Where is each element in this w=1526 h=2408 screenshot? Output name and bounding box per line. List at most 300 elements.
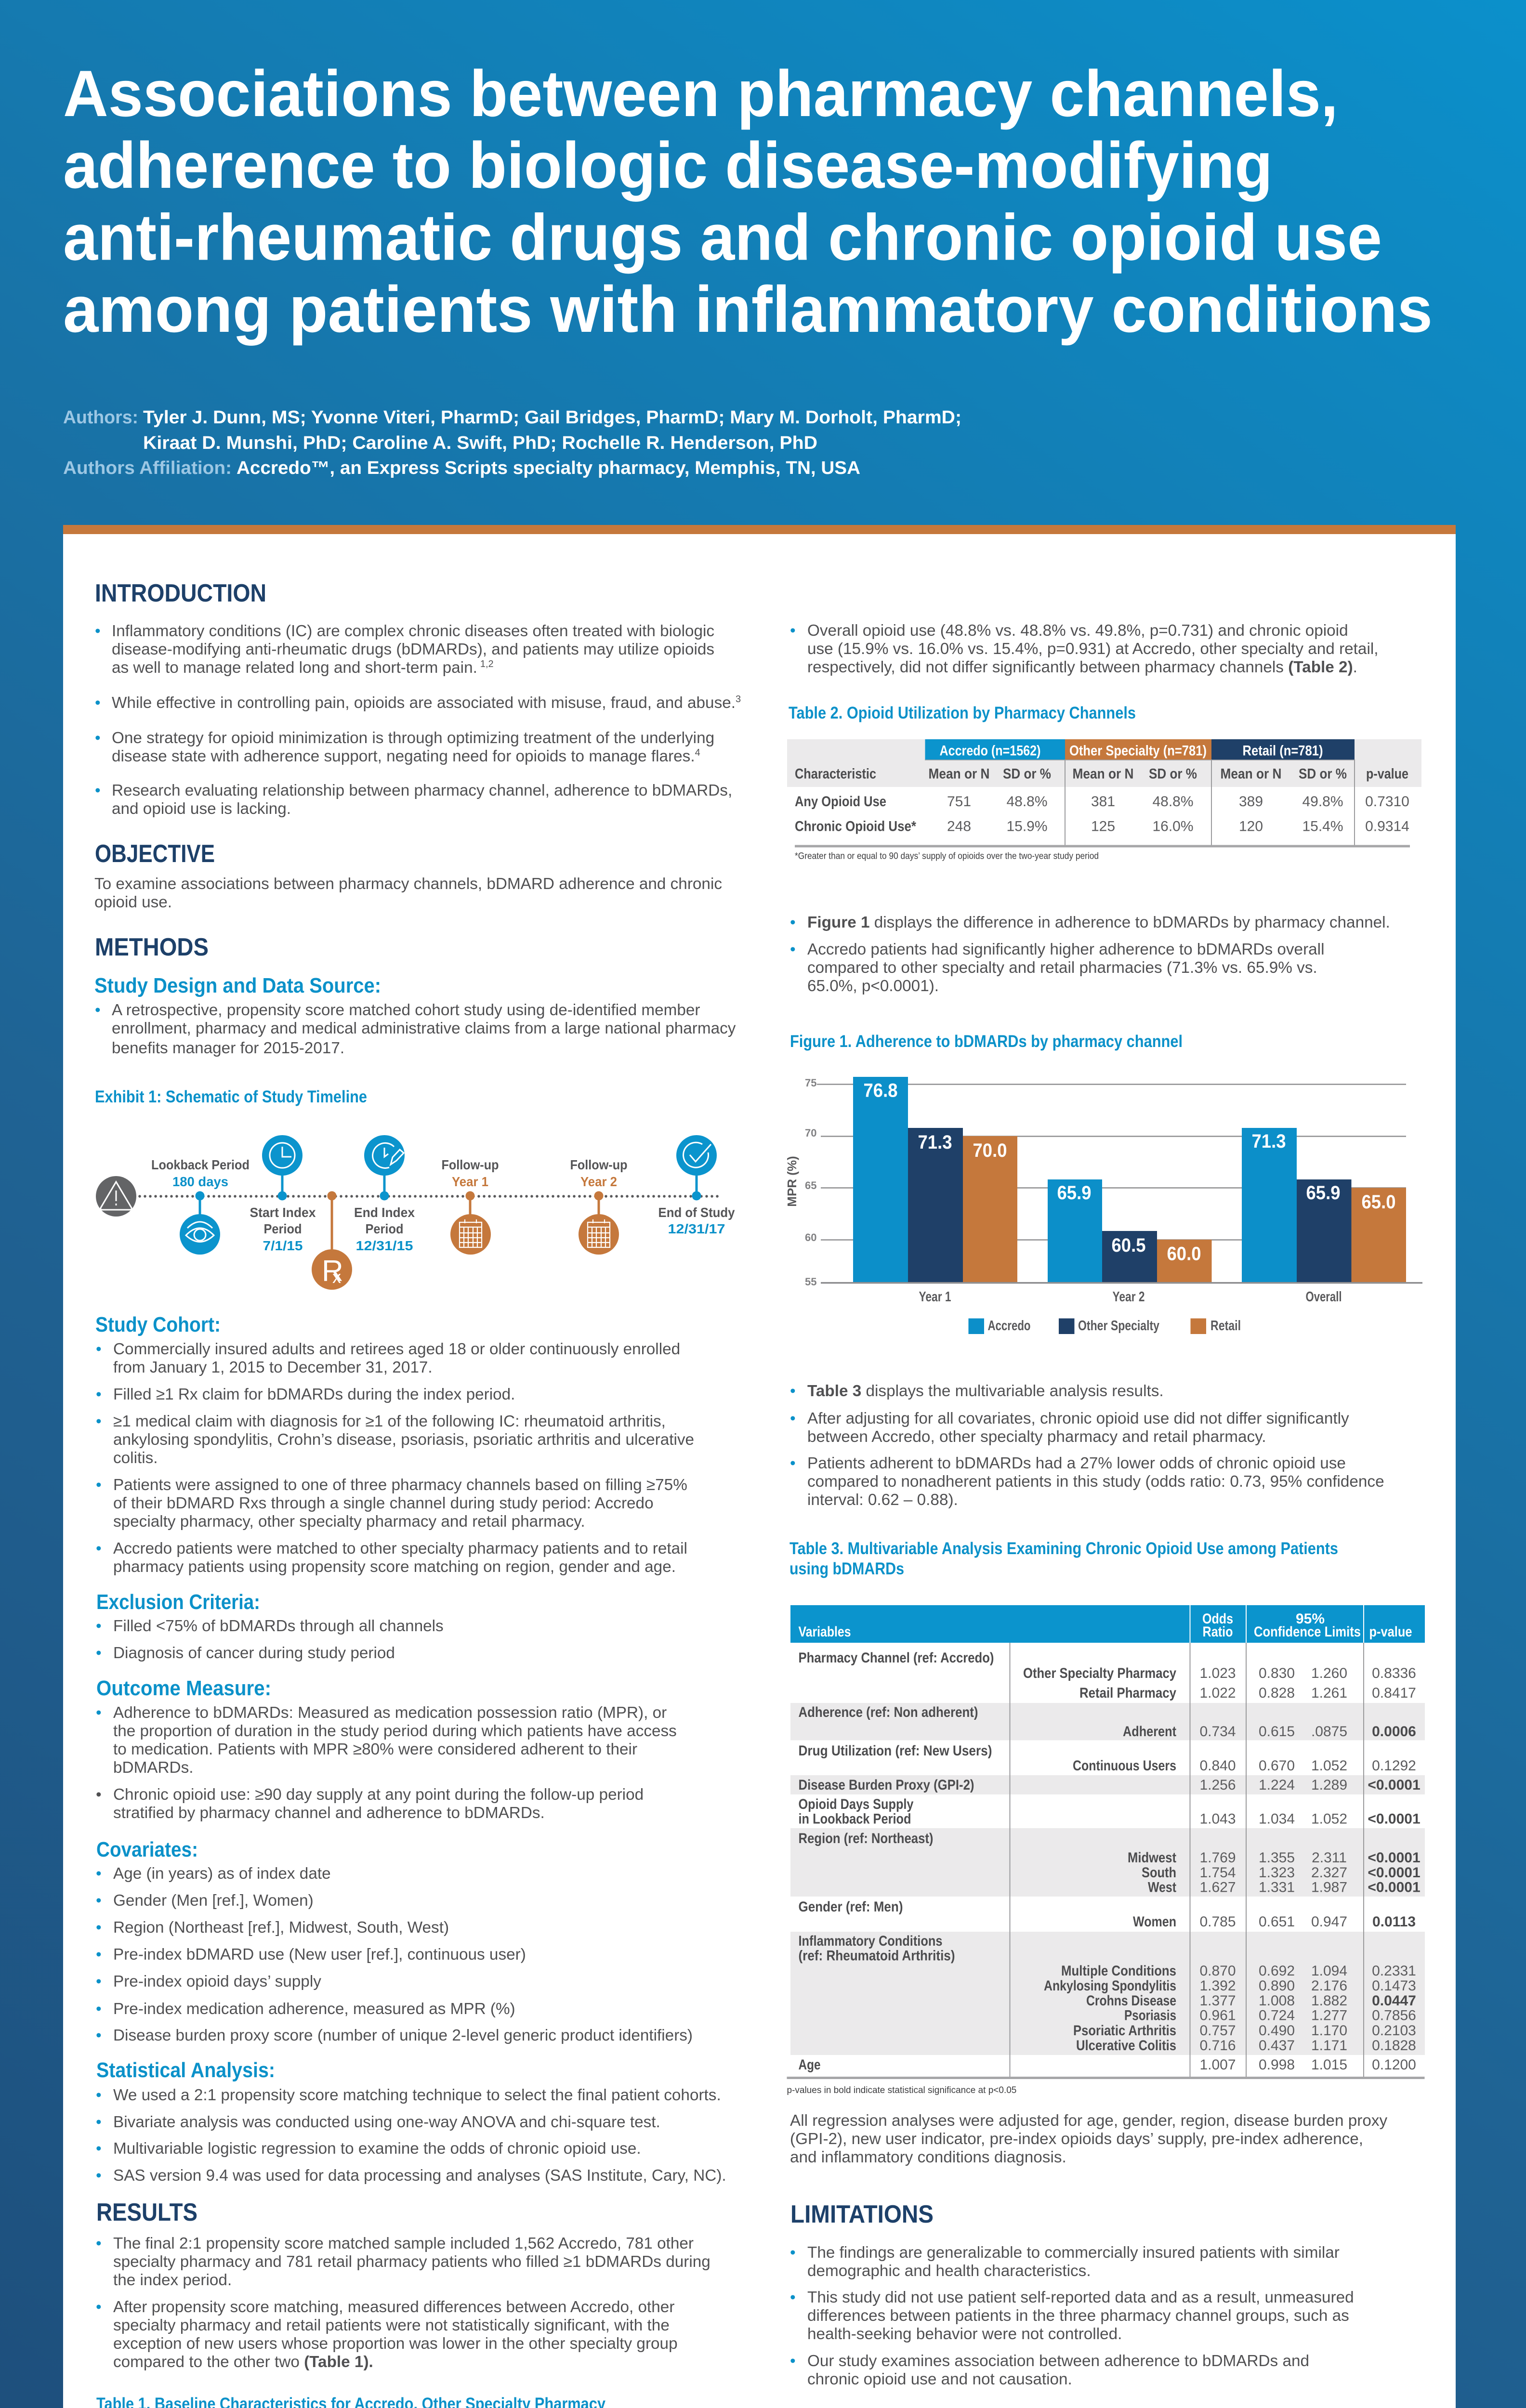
text: covariates bullets: • xyxy=(96,2000,102,2018)
milestone: end index period: End Index xyxy=(354,1205,415,1220)
text: figure 1 bullets: • xyxy=(790,914,796,931)
milestone: start index period: 7/1/15 xyxy=(263,1238,303,1253)
milestone: end index period xyxy=(354,1135,415,1253)
text: results bullets: specialty pharmacy and 781 retail pharmacy patients who filled ≥1 bDMARDs during xyxy=(113,2253,710,2271)
row: inflammatory conditions: 0.437 xyxy=(1259,2038,1295,2054)
subheading: exclusion criteria: Exclusion Criteria: xyxy=(96,1590,260,1614)
title: among patients with inflammatory conditions xyxy=(63,273,1433,346)
legend: Accredo xyxy=(987,1318,1031,1334)
text: results bullets: compared to the other two xyxy=(113,2353,304,2371)
row: region: 1.754 xyxy=(1199,1865,1236,1881)
text: results bullets: exception of new users whose proportion was lower in the other specialty group xyxy=(113,2335,678,2353)
text: covariates bullets: • xyxy=(96,1946,102,1963)
row: adherence: 0.0006 xyxy=(1372,1724,1416,1740)
bars: overall: 65.9 xyxy=(1306,1182,1340,1204)
row: inflammatory conditions xyxy=(799,1933,1416,2054)
table 2 header: p-value xyxy=(1366,766,1408,782)
row: gender: 0.785 xyxy=(1199,1914,1236,1930)
row: region: 1.627 xyxy=(1199,1879,1236,1896)
text: study cohort bullets: specialty pharmacy, other specialty pharmacy and retail pharmacy. xyxy=(113,1513,585,1531)
shaded row bands xyxy=(790,1703,1425,2055)
milestone: follow-up year 1 xyxy=(441,1157,499,1255)
row: any opioid use: 48.8% xyxy=(1006,794,1048,810)
row: any opioid use: Any Opioid Use xyxy=(795,794,886,810)
row: region: Region (ref: Northeast) xyxy=(799,1831,934,1846)
text: table 3 bullets: between Accredo, other specialty pharmacy and retail pharmacy. xyxy=(807,1428,1266,1446)
row: any opioid use xyxy=(795,794,1409,810)
row: pharmacy channel: Retail Pharmacy xyxy=(1079,1685,1176,1701)
text: objective: To examine associations between pharmacy channels, bDMARD adherence and chronic xyxy=(94,875,722,893)
row: drug utilization: 0.670 xyxy=(1259,1758,1295,1774)
text: study design bullet: • xyxy=(95,1001,101,1019)
row: inflammatory conditions: 0.890 xyxy=(1259,1978,1295,1994)
milestone: start index period xyxy=(250,1135,316,1253)
row: any opioid use: 0.7310 xyxy=(1365,794,1409,810)
text: exclusion bullets: • xyxy=(96,1644,102,1662)
row: any opioid use: 48.8% xyxy=(1152,794,1194,810)
table 2 header: SD or % xyxy=(1299,766,1347,782)
title: adherence to biologic disease-modifying xyxy=(63,129,1273,202)
text: outcome bullets: • xyxy=(96,1786,102,1804)
text: intro bullet 3: One strategy for opioid minimization is through optimizing treatment of the underlying xyxy=(112,729,714,747)
x axis labels xyxy=(919,1289,1342,1305)
bars: year 1 xyxy=(853,1077,1017,1283)
row: inflammatory conditions: Psoriatic Arthritis xyxy=(1073,2023,1176,2039)
text: results bullets: • xyxy=(96,2235,102,2252)
authors and affiliation: Accredo™, an Express Scripts specialty pharmacy, Memphis, TN, USA xyxy=(237,458,860,478)
text: figure 1 bullets: • xyxy=(790,941,796,958)
text: statistical analysis bullets: • xyxy=(96,2167,102,2185)
row: inflammatory conditions: 0.2331 xyxy=(1372,1963,1416,1979)
text: table 3 bullets: After adjusting for all covariates, chronic opioid use did not differ significantly xyxy=(807,1410,1349,1427)
row: pharmacy channel: 1.023 xyxy=(1199,1665,1236,1681)
row: inflammatory conditions: 1.008 xyxy=(1259,1993,1295,2009)
row: chronic opioid use: Chronic Opioid Use* xyxy=(795,819,916,834)
row: pharmacy channel: Pharmacy Channel (ref: Accredo) xyxy=(799,1650,994,1666)
text: overall opioid use bullet: • xyxy=(790,622,796,640)
bars: year 2: 60.5 xyxy=(1112,1235,1145,1256)
heading: objective: OBJECTIVE xyxy=(95,840,215,868)
row: region: 2.311 xyxy=(1312,1850,1347,1866)
milestone: follow-up year 1: Year 1 xyxy=(452,1174,488,1189)
text: results bullets: specialty pharmacy and retail patients were not statistically significant, with the xyxy=(113,2316,670,2334)
row: age: Age xyxy=(799,2057,821,2073)
row: region: 1.987 xyxy=(1311,1879,1347,1896)
text: outcome bullets: • xyxy=(96,1704,102,1722)
row: inflammatory conditions: 0.7856 xyxy=(1372,2007,1416,2024)
row: inflammatory conditions: Inflammatory Conditions xyxy=(799,1933,942,1949)
row: any opioid use: 381 xyxy=(1091,794,1115,810)
panel: right column xyxy=(785,622,1425,2408)
y axis tick labels xyxy=(805,1077,816,1288)
row: region xyxy=(799,1831,1421,1896)
row: disease burden proxy: <0.0001 xyxy=(1368,1777,1421,1793)
title: anti-rheumatic drugs and chronic opioid use xyxy=(63,200,1382,274)
legend xyxy=(968,1318,1241,1334)
row: pharmacy channel: 0.8336 xyxy=(1372,1665,1416,1681)
row: disease burden proxy: 1.289 xyxy=(1311,1777,1347,1793)
row: chronic opioid use: 248 xyxy=(947,819,971,834)
text: intro bullet 2: 3 xyxy=(736,694,741,705)
text: covariates bullets: Pre-index bDMARD use (New user [ref.], continuous user) xyxy=(113,1946,526,1963)
row: drug utilization xyxy=(799,1743,1416,1774)
row: opioid days supply: 1.043 xyxy=(1199,1811,1236,1827)
bars: year 1: 70.0 xyxy=(973,1140,1007,1161)
row: inflammatory conditions: 0.490 xyxy=(1259,2023,1295,2039)
y axis title: MPR (%) xyxy=(785,1156,799,1207)
row: disease burden proxy xyxy=(799,1777,1421,1793)
text: outcome bullets: the proportion of duration in the study period during which patients have access xyxy=(113,1722,677,1740)
row: gender: 0.947 xyxy=(1311,1914,1347,1930)
text: study design bullet: enrollment, pharmacy and medical administrative claims from a large national pharmacy xyxy=(112,1020,736,1037)
row: inflammatory conditions: 1.377 xyxy=(1199,1993,1236,2009)
row: age: 0.998 xyxy=(1259,2057,1295,2073)
text: limitations bullets: chronic opioid use and not causation. xyxy=(807,2370,1072,2388)
row: pharmacy channel: 1.022 xyxy=(1199,1685,1236,1701)
caption: table 3 xyxy=(789,1539,1338,1578)
text: study cohort bullets: • xyxy=(96,1340,102,1358)
text: exclusion bullets: Filled <75% of bDMARDs through all channels xyxy=(113,1617,444,1635)
text: table 3 bullets: • xyxy=(790,1382,796,1400)
subheading: study design: Study Design and Data Source: xyxy=(94,974,381,997)
text: covariates bullets: • xyxy=(96,1865,102,1883)
table 3: multivariable analysis xyxy=(787,1605,1425,2079)
text: exclusion bullets: Diagnosis of cancer during study period xyxy=(113,1644,395,1662)
text: results bullets: • xyxy=(96,2298,102,2316)
text: outcome bullets: stratified by pharmacy channel and adherence to bDMARDs. xyxy=(113,1804,545,1822)
table 3 footnote: p-values in bold indicate statistical significance at p<0.05 xyxy=(787,2085,1016,2095)
row: inflammatory conditions: 1.171 xyxy=(1311,2038,1347,2054)
text: intro bullet 1: • xyxy=(95,622,101,640)
row: pharmacy channel: 1.260 xyxy=(1311,1665,1347,1681)
heading: results: RESULTS xyxy=(96,2199,197,2226)
row: inflammatory conditions: 1.094 xyxy=(1311,1963,1347,1979)
table 2 header: Mean or N xyxy=(929,766,989,782)
text: intro bullet 1: disease-modifying anti-rheumatic drugs (bDMARDs), and patients may utilize opioids xyxy=(112,641,714,658)
text: intro bullet 3: • xyxy=(95,729,101,747)
row: inflammatory conditions: 0.716 xyxy=(1199,2038,1236,2054)
text: regression adjustment note: and inflammatory conditions diagnosis. xyxy=(790,2148,1066,2166)
text: intro bullet 3: 4 xyxy=(695,747,700,758)
row: drug utilization: 0.840 xyxy=(1199,1758,1236,1774)
title xyxy=(63,57,1433,346)
row: region: South xyxy=(1142,1865,1176,1881)
row: disease burden proxy: 1.224 xyxy=(1259,1777,1295,1793)
caption: exhibit 1: Exhibit 1: Schematic of Study Timeline xyxy=(95,1087,367,1106)
table 2 header xyxy=(787,739,1421,787)
y axis tick labels: 60 xyxy=(805,1231,816,1243)
x axis labels: Year 1 xyxy=(919,1289,951,1305)
table 3 header: p-value xyxy=(1369,1624,1412,1640)
row: inflammatory conditions: 0.1828 xyxy=(1372,2038,1416,2054)
text: objective: opioid use. xyxy=(94,893,172,911)
table 3 header: Ratio xyxy=(1202,1624,1233,1640)
table 2 header: SD or % xyxy=(1003,766,1051,782)
text: limitations bullets: Our study examines association between adherence to bDMARDs and xyxy=(807,2352,1309,2370)
text: outcome bullets: to medication. Patients with MPR ≥80% were considered adherent to their xyxy=(113,1741,637,1758)
row: inflammatory conditions: 2.176 xyxy=(1311,1978,1347,1994)
heading: methods: METHODS xyxy=(95,933,209,961)
row: any opioid use: 751 xyxy=(947,794,971,810)
table 2 header: Retail (n=781) xyxy=(1243,743,1323,759)
row: region: 2.327 xyxy=(1311,1865,1347,1881)
text: study cohort bullets: ≥1 medical claim with diagnosis for ≥1 of the following IC: rheumatoid arthritis, xyxy=(113,1413,666,1430)
text: study design bullet: A retrospective, propensity score matched cohort study using de-identified member xyxy=(112,1001,700,1019)
text: limitations bullets: differences between patients in the three pharmacy channel groups, such as xyxy=(807,2307,1349,2325)
heading: limitations: LIMITATIONS xyxy=(790,2200,934,2228)
milestone: lookback period: 180 days xyxy=(172,1174,228,1189)
row: opioid days supply: in Lookback Period xyxy=(799,1811,911,1827)
text: results bullets: the index period. xyxy=(113,2271,232,2289)
row: gender: Women xyxy=(1133,1914,1176,1930)
y axis tick labels: 55 xyxy=(805,1276,816,1288)
milestone: end index period: Period xyxy=(365,1221,404,1236)
caption: table 2: Table 2. Opioid Utilization by Pharmacy Channels xyxy=(789,704,1136,722)
table 2 header: Mean or N xyxy=(1221,766,1281,782)
row: chronic opioid use: 120 xyxy=(1239,819,1263,834)
row: inflammatory conditions: Ulcerative Colitis xyxy=(1076,2038,1176,2054)
text: covariates bullets: Disease burden proxy score (number of unique 2-level generic product identifiers) xyxy=(113,2027,693,2044)
x axis labels: Year 2 xyxy=(1113,1289,1144,1305)
text: figure 1 bullets: 65.0%, p<0.0001). xyxy=(807,977,939,995)
row: age: 0.1200 xyxy=(1372,2057,1416,2073)
text: study cohort bullets: • xyxy=(96,1386,102,1403)
legend: Other Specialty xyxy=(1078,1318,1159,1334)
row: drug utilization: 1.052 xyxy=(1311,1758,1347,1774)
row: inflammatory conditions: 0.961 xyxy=(1199,2007,1236,2024)
bars: overall: 65.0 xyxy=(1361,1191,1396,1213)
table 2 footnote: *Greater than or equal to 90 days’ supply of opioids over the two-year study period xyxy=(795,851,1099,861)
milestone: follow-up year 2: Follow-up xyxy=(570,1157,627,1172)
table 3 header: Confidence Limits xyxy=(1254,1624,1361,1640)
table 2 header: Mean or N xyxy=(1072,766,1134,782)
text: limitations bullets: • xyxy=(790,2352,796,2370)
text: intro bullet 4: Research evaluating relationship between pharmacy channel, adherence to bDMARDs, xyxy=(112,782,732,799)
text: outcome bullets: Adherence to bDMARDs: Measured as medication possession ratio (MPR), or xyxy=(113,1704,667,1722)
text: outcome bullets: bDMARDs. xyxy=(113,1759,194,1777)
text: overall opioid use bullet: use (15.9% vs. 16.0% vs. 15.4%, p=0.931) at Accredo, other specialty and retail, xyxy=(807,640,1379,658)
row: gender: Gender (ref: Men) xyxy=(799,1899,903,1915)
text: table 3 bullets: Patients adherent to bDMARDs had a 27% lower odds of chronic opioid use xyxy=(807,1454,1346,1472)
row: age: 1.007 xyxy=(1199,2057,1236,2073)
text: covariates bullets: • xyxy=(96,1919,102,1937)
title: Associations between pharmacy channels, xyxy=(63,57,1338,130)
milestone: follow-up year 1: Follow-up xyxy=(441,1157,499,1172)
text: covariates bullets: • xyxy=(96,2027,102,2044)
x axis labels: Overall xyxy=(1305,1289,1342,1305)
text: exclusion bullets: • xyxy=(96,1617,102,1635)
y axis tick labels: 70 xyxy=(805,1127,816,1139)
text: statistical analysis bullets: SAS version 9.4 was used for data processing and analyses (SAS Institute, Cary, NC). xyxy=(113,2167,726,2185)
authors and affiliation: Tyler J. Dunn, MS; Yvonne Viteri, PharmD; Gail Bridges, PharmD; Mary M. Dorholt, PharmD; xyxy=(143,407,961,428)
row: opioid days supply: 1.052 xyxy=(1311,1811,1347,1827)
table 2: opioid utilization xyxy=(787,739,1421,848)
milestone: follow-up year 2 xyxy=(570,1157,627,1255)
text: study cohort bullets: Commercially insured adults and retirees aged 18 or older continuously enrolled xyxy=(113,1340,680,1358)
text: study cohort bullets: ankylosing spondylitis, Crohn’s disease, psoriasis, psoriatic arthritis and ulcerative xyxy=(113,1431,694,1449)
text: outcome bullets: Chronic opioid use: ≥90 day supply at any point during the follow-up period xyxy=(113,1786,644,1804)
text: overall opioid use bullet: respectively, did not differ significantly between pharmacy channels xyxy=(807,658,1288,676)
text: study cohort bullets: of their bDMARD Rxs through a single channel during study period: Accredo xyxy=(113,1494,654,1512)
row: inflammatory conditions: (ref: Rheumatoid Arthritis) xyxy=(799,1948,955,1964)
text: limitations bullets: • xyxy=(790,2244,796,2262)
row: region: 1.355 xyxy=(1259,1850,1295,1866)
text: covariates bullets: Age (in years) as of index date xyxy=(113,1865,331,1883)
text: overall opioid use bullet: (Table 2). xyxy=(1288,658,1357,676)
row: region: <0.0001 xyxy=(1368,1879,1421,1896)
text: results bullets: After propensity score matching, measured differences between Accredo, other xyxy=(113,2298,674,2316)
subheading: outcome measure: Outcome Measure: xyxy=(96,1676,271,1700)
text: intro bullet 2: While effective in controlling pain, opioids are associated with misuse, fraud, and abuse. xyxy=(112,694,736,712)
text: regression adjustment note: All regression analyses were adjusted for age, gender, region, disease burden proxy xyxy=(790,2112,1387,2130)
text: table 3 bullets: • xyxy=(790,1410,796,1427)
row: region: 1.769 xyxy=(1199,1850,1236,1866)
text: intro bullet 4: and opioid use is lacking. xyxy=(112,800,291,818)
text: table 3 bullets: • xyxy=(790,1454,796,1472)
bars: year 2 xyxy=(1048,1179,1212,1283)
caption: figure 1: Figure 1. Adherence to bDMARDs by pharmacy channel xyxy=(790,1032,1183,1051)
row: chronic opioid use: 15.9% xyxy=(1006,819,1048,834)
table 3 header xyxy=(790,1605,1425,1643)
text: statistical analysis bullets: Multivariable logistic regression to examine the odds of chronic opioid use. xyxy=(113,2140,641,2158)
text: figure 1 bullets: Accredo patients had significantly higher adherence to bDMARDs overall xyxy=(807,941,1324,958)
row: pharmacy channel: 0.828 xyxy=(1259,1685,1295,1701)
milestone: follow-up year 2: Year 2 xyxy=(580,1174,617,1189)
row: inflammatory conditions: 0.0447 xyxy=(1372,1993,1416,2009)
row: inflammatory conditions: Multiple Conditions xyxy=(1061,1963,1176,1979)
authors and affiliation: Authors: xyxy=(63,407,138,428)
row: disease burden proxy: 1.256 xyxy=(1199,1777,1236,1793)
row: inflammatory conditions: 1.882 xyxy=(1311,1993,1347,2009)
row: opioid days supply: Opioid Days Supply xyxy=(799,1796,914,1812)
row: region: West xyxy=(1148,1879,1176,1896)
text: statistical analysis bullets: • xyxy=(96,2086,102,2104)
row: inflammatory conditions: 1.170 xyxy=(1311,2023,1347,2039)
row: adherence: 0.615 xyxy=(1259,1724,1295,1740)
row: pharmacy channel: 0.830 xyxy=(1259,1665,1295,1681)
row: pharmacy channel: 0.8417 xyxy=(1372,1685,1416,1701)
text: statistical analysis bullets: • xyxy=(96,2140,102,2158)
text: limitations bullets: health-seeking behavior were not controlled. xyxy=(807,2325,1122,2343)
milestone: prescription fill: R xyxy=(322,1255,343,1288)
row: drug utilization: 0.1292 xyxy=(1372,1758,1416,1774)
text: covariates bullets: Pre-index medication adherence, measured as MPR (%) xyxy=(113,2000,515,2018)
bar chart: adherence by pharmacy channel xyxy=(785,1077,1422,1334)
text: limitations bullets: The findings are generalizable to commercially insured patients with similar xyxy=(807,2244,1340,2262)
milestone: start index period: Period xyxy=(264,1221,302,1236)
text: limitations bullets: This study did not use patient self-reported data and as a result, unmeasured xyxy=(807,2289,1354,2306)
text: limitations bullets: demographic and health characteristics. xyxy=(807,2262,1091,2280)
text: intro bullet 2: • xyxy=(95,694,101,712)
text: regression adjustment note: (GPI-2), new user indicator, pre-index opioids days’ supply, pre-index adherence, xyxy=(790,2130,1363,2148)
bars: overall: 71.3 xyxy=(1251,1131,1286,1152)
row: drug utilization: Drug Utilization (ref: New Users) xyxy=(799,1743,992,1759)
table 2 header: Accredo (n=1562) xyxy=(939,743,1040,759)
row: chronic opioid use: 16.0% xyxy=(1152,819,1194,834)
timeline: schematic of study xyxy=(96,1135,735,1290)
milestone: end of study xyxy=(658,1135,735,1236)
table 2 header: Other Specialty (n=781) xyxy=(1069,743,1207,759)
text: intro bullet 1: Inflammatory conditions (IC) are complex chronic diseases often treated with biologic xyxy=(112,622,714,640)
row: region: Midwest xyxy=(1128,1850,1176,1866)
text: table 3 bullets: Table 3 xyxy=(807,1382,861,1400)
milestone: end of study: 12/31/17 xyxy=(668,1221,725,1236)
text: study cohort bullets: • xyxy=(96,1413,102,1430)
text: study cohort bullets: Filled ≥1 Rx claim for bDMARDs during the index period. xyxy=(113,1386,515,1403)
text: covariates bullets: • xyxy=(96,1973,102,1990)
milestone: prescription fill xyxy=(312,1191,352,1290)
bars: overall xyxy=(1242,1128,1406,1283)
row: chronic opioid use: 0.9314 xyxy=(1365,819,1409,834)
authors and affiliation xyxy=(63,407,961,478)
row: pharmacy channel: Other Specialty Pharmacy xyxy=(1023,1665,1176,1681)
bars: year 1: 76.8 xyxy=(863,1080,898,1101)
text: limitations bullets: • xyxy=(790,2289,796,2306)
milestone: lookback period: Lookback Period xyxy=(151,1157,250,1172)
text: statistical analysis bullets: • xyxy=(96,2113,102,2131)
row: inflammatory conditions: 0.757 xyxy=(1199,2023,1236,2039)
text: figure 1 bullets: Figure 1 xyxy=(807,914,870,931)
text: study cohort bullets: Patients were assigned to one of three pharmacy channels based on filling ≥75% xyxy=(113,1476,687,1494)
row: adherence: 0.734 xyxy=(1199,1724,1236,1740)
row: inflammatory conditions: Ankylosing Spondylitis xyxy=(1044,1978,1176,1994)
subheading: statistical analysis: Statistical Analysis: xyxy=(96,2058,275,2082)
legend: Retail xyxy=(1210,1318,1241,1334)
row: any opioid use: 49.8% xyxy=(1302,794,1343,810)
row: any opioid use: 389 xyxy=(1239,794,1263,810)
row: inflammatory conditions: 1.277 xyxy=(1311,2007,1347,2024)
text: table 3 bullets: displays the multivariable analysis results. xyxy=(861,1382,1164,1400)
heading: introduction: INTRODUCTION xyxy=(95,579,266,607)
row: adherence: Adherence (ref: Non adherent) xyxy=(799,1704,978,1720)
panel: left column xyxy=(94,579,741,2408)
row: inflammatory conditions: 0.870 xyxy=(1199,1963,1236,1979)
row: opioid days supply: 1.034 xyxy=(1259,1811,1295,1827)
text: covariates bullets: Gender (Men [ref.], Women) xyxy=(113,1892,314,1910)
text: intro bullet 1: 1,2 xyxy=(480,659,494,669)
text: table 3 bullets: compared to nonadherent patients in this study (odds ratio: 0.73, 95% confidence xyxy=(807,1473,1384,1491)
row: pharmacy channel: 1.261 xyxy=(1311,1685,1347,1701)
text: study cohort bullets: • xyxy=(96,1540,102,1557)
row: chronic opioid use: 125 xyxy=(1091,819,1115,834)
row: region: <0.0001 xyxy=(1368,1850,1421,1866)
table 2 header: Characteristic xyxy=(795,766,876,782)
milestone: prescription fill: x xyxy=(332,1267,341,1287)
text: study design bullet: benefits manager for 2015-2017. xyxy=(112,1039,344,1057)
bars: year 2: 65.9 xyxy=(1057,1182,1092,1204)
row: inflammatory conditions: 0.692 xyxy=(1259,1963,1295,1979)
text: figure 1 bullets: displays the difference in adherence to bDMARDs by pharmacy channel. xyxy=(870,914,1390,931)
text: overall opioid use bullet: Overall opioid use (48.8% vs. 48.8% vs. 49.8%, p=0.731) and chronic opioid xyxy=(807,622,1348,640)
row: adherence: Adherent xyxy=(1123,1724,1176,1740)
row: disease burden proxy: Disease Burden Proxy (GPI-2) xyxy=(799,1777,974,1793)
y axis tick labels: 75 xyxy=(805,1077,816,1089)
panel: white content background with orange bars xyxy=(63,525,1456,2408)
row: gender: 0.0113 xyxy=(1372,1914,1416,1930)
text: intro bullet 3: disease state with adherence support, negating need for opioids to manage flares. xyxy=(112,747,695,765)
text: results bullets: The final 2:1 propensity score matched sample included 1,562 Accredo, 781 other xyxy=(113,2235,694,2252)
row: chronic opioid use xyxy=(795,819,1409,834)
text: statistical analysis bullets: Bivariate analysis was conducted using one-way ANOVA and chi-square test. xyxy=(113,2113,660,2131)
table 3 header: Variables xyxy=(799,1624,851,1640)
text: statistical analysis bullets: We used a 2:1 propensity score matching technique to select the final patient cohorts. xyxy=(113,2086,721,2104)
row: inflammatory conditions: Psoriasis xyxy=(1124,2007,1176,2024)
milestone: start index period: Start Index xyxy=(250,1205,316,1220)
row: chronic opioid use: 15.4% xyxy=(1302,819,1343,834)
y axis tick labels: 65 xyxy=(805,1179,816,1191)
text: study cohort bullets: colitis. xyxy=(113,1449,158,1467)
text: figure 1 bullets: compared to other specialty and retail pharmacies (71.3% vs. 65.9% vs. xyxy=(807,959,1317,977)
